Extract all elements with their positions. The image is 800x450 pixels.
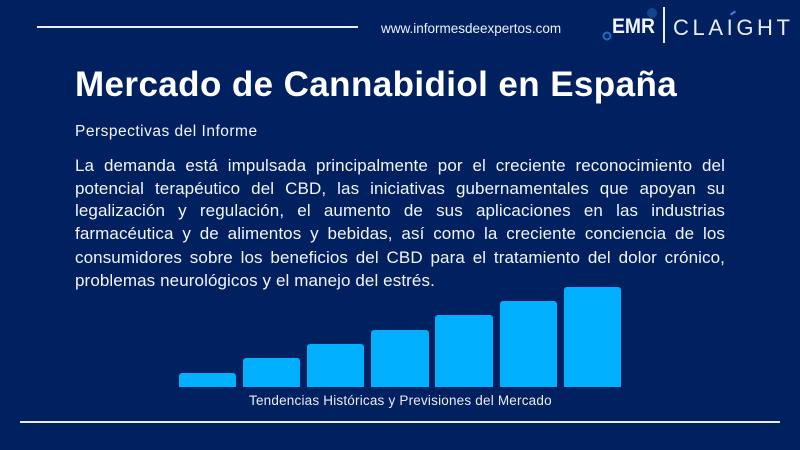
body paragraph: farmacéutica y de alimentos y bebidas, así como la creciente conciencia de los [75, 224, 725, 243]
body paragraph: legalización y regulación, el aumento de sus aplicaciones en las industrias [75, 201, 725, 220]
body paragraph: consumidores sobre los beneficios del CBD para el tratamiento del dolor crónico, [75, 248, 725, 267]
body paragraph: La demanda está impulsada principalmente por el creciente reconocimiento del [75, 156, 725, 175]
bar 4 [371, 330, 429, 387]
body paragraph: potencial terapéutico del CBD, las iniciativas gubernamentales que apoyan su [75, 179, 725, 198]
top rule [37, 26, 358, 28]
bar 6 [500, 301, 557, 387]
body paragraph: problemas neurológicos y el manejo del estrés. [75, 271, 435, 290]
logos: EMR and Claight [602, 7, 790, 43]
bar 5 [435, 315, 493, 387]
icon: EMR dots [604, 8, 657, 40]
bar chart [179, 287, 621, 387]
Claight wordmark: CLAIGHT [673, 15, 790, 40]
icon: Claight accent [730, 10, 736, 16]
website url: www.informesdeexpertos.com [381, 21, 561, 36]
subtitle: Perspectivas del Informe [75, 123, 258, 140]
body paragraph [75, 156, 725, 290]
bottom rule [20, 421, 780, 423]
title: Mercado de Cannabidiol en España [75, 65, 677, 104]
bar 1 [179, 373, 236, 387]
EMR wordmark: EMR [612, 15, 655, 38]
bar 7 [564, 287, 621, 387]
bar 2 [243, 358, 300, 387]
bar 3 [307, 344, 364, 387]
logo divider [663, 7, 665, 43]
chart caption: Tendencias Históricas y Previsiones del Mercado [249, 393, 552, 408]
